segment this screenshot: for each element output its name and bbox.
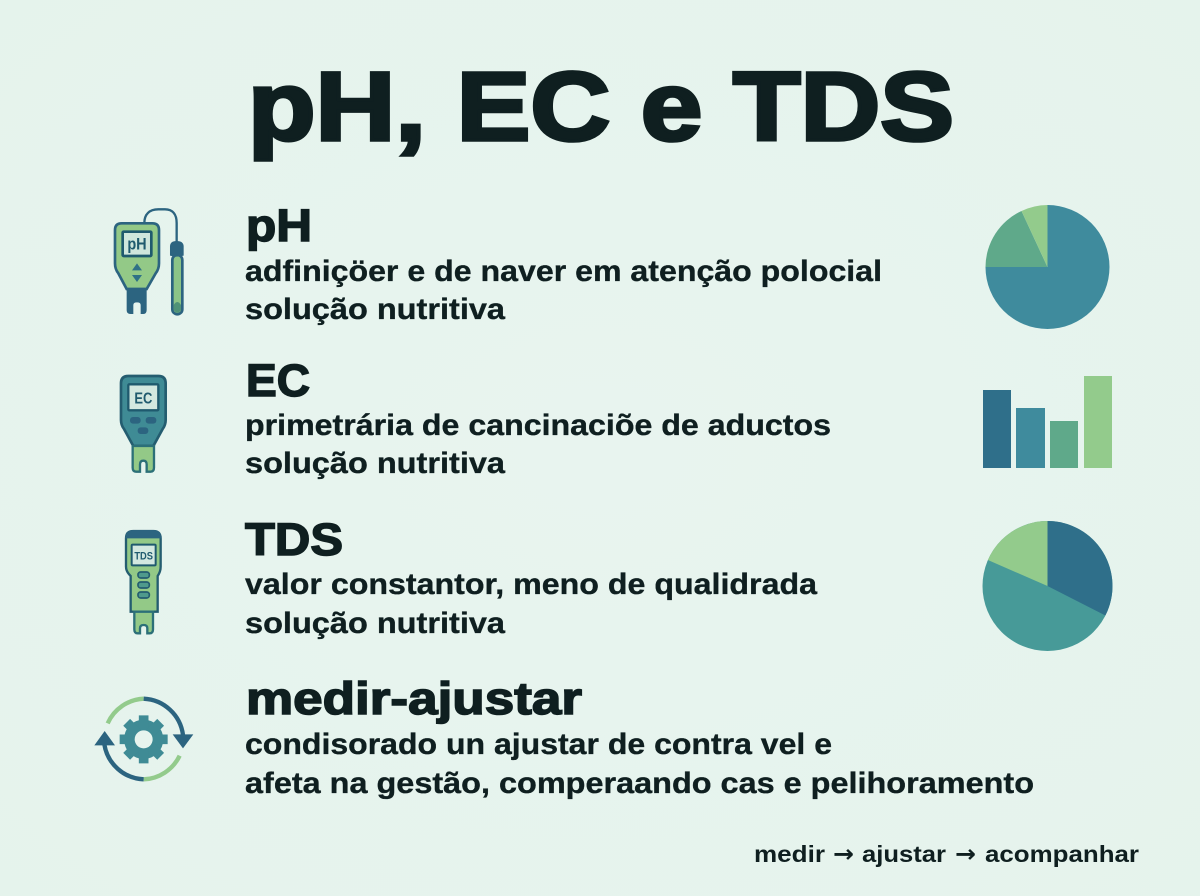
- footer: process flow: →: [955, 840, 976, 868]
- text: EC description: [245, 409, 831, 480]
- text: EC description: primetrária de cancinaciõe de aductos: [245, 409, 831, 442]
- footer: process flow: acompanhar: [985, 841, 1139, 867]
- heading: pH: pH: [246, 200, 312, 251]
- section: EC: [121, 355, 1112, 480]
- icon: TDS meter: [125, 530, 161, 633]
- icon: pH meter with probe: [115, 209, 184, 314]
- text: TDS description: valor constantor, meno de qualidrada: [245, 568, 817, 601]
- footer: process flow: medir: [754, 841, 825, 867]
- chart: TDS pie: [982, 521, 1112, 651]
- text: medir-ajustar description: condisorado un ajustar de contra vel e: [245, 728, 832, 761]
- title: pH, EC e TDS: [248, 52, 954, 161]
- footer: process flow: [754, 840, 1139, 868]
- icon: TDS meter: TDS: [134, 550, 153, 562]
- heading: EC: EC: [246, 355, 310, 406]
- section: TDS: [125, 514, 1113, 651]
- heading: TDS: TDS: [245, 514, 343, 565]
- icon: gear with cycle arrows: [94, 699, 193, 779]
- icon: pH meter with probe: pH: [127, 235, 147, 254]
- section: medir-ajustar: [94, 673, 1034, 800]
- section: pH: [115, 200, 1110, 329]
- heading: medir-ajustar: medir-ajustar: [246, 673, 582, 724]
- text: medir-ajustar description: [245, 728, 1034, 800]
- footer: process flow: ajustar: [862, 841, 946, 867]
- text: EC description: solução nutritiva: [245, 447, 505, 480]
- chart: EC bars: [983, 376, 1112, 468]
- text: pH description: adfiniçöer e de naver em atenção polocial: [245, 255, 882, 288]
- footer: process flow: →: [833, 840, 854, 868]
- chart: pH pie: [986, 205, 1110, 329]
- icon: EC meter: EC: [134, 391, 153, 408]
- text: medir-ajustar description: afeta na gestão, comperaando cas e pelihoramento: [245, 767, 1034, 800]
- text: pH description: [245, 255, 882, 326]
- text: TDS description: solução nutritiva: [245, 607, 505, 640]
- text: pH description: solução nutritiva: [245, 293, 505, 326]
- icon: EC meter: [121, 376, 166, 472]
- text: TDS description: [245, 568, 817, 640]
